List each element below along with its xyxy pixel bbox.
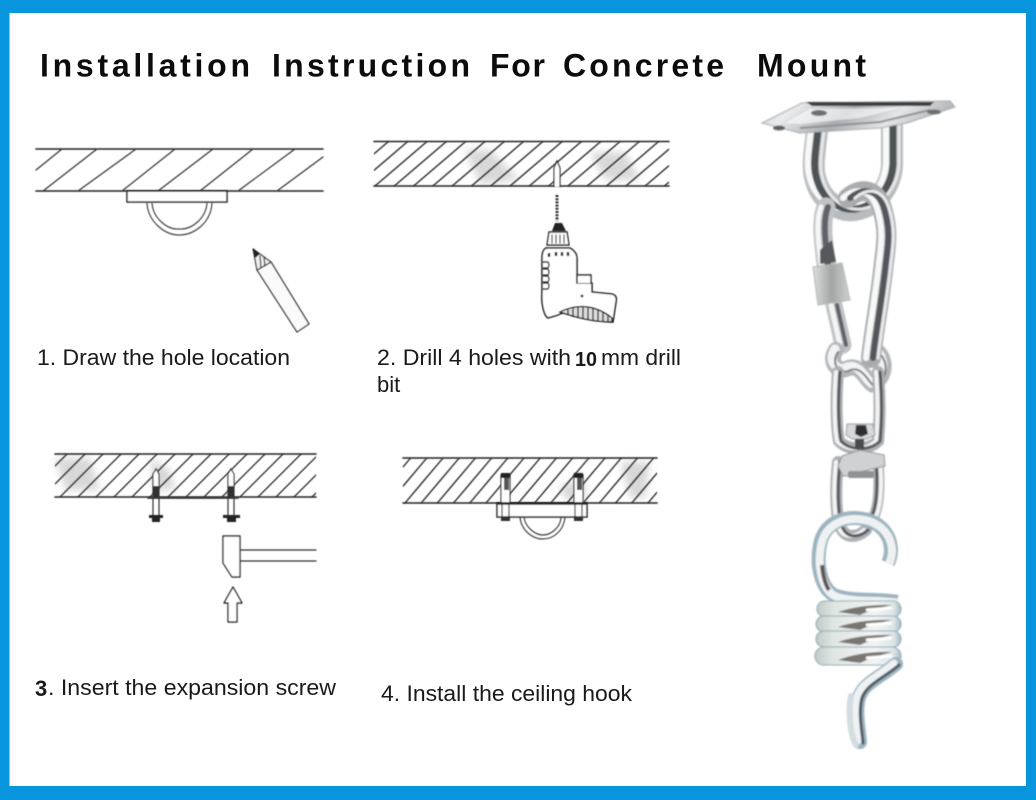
mount plate <box>762 101 955 133</box>
icon: hammer <box>223 536 316 577</box>
mounted plate, bolts and ring <box>497 473 587 539</box>
step 2 caption: 10 <box>575 349 597 371</box>
step 2 caption <box>377 345 681 397</box>
swivel collar <box>838 450 885 476</box>
upper swivel eye <box>835 372 882 448</box>
title: Concrete <box>563 48 724 84</box>
panel: step 1 draw the hole location <box>36 149 323 370</box>
concrete slab with hatching <box>374 142 669 186</box>
carabiner threaded detail <box>820 240 836 264</box>
step 2 caption: mm drill <box>601 345 681 370</box>
title <box>40 48 866 84</box>
title: Instruction <box>272 48 470 84</box>
title: Installation <box>40 48 250 84</box>
photo: ceiling hook hardware assembly <box>762 101 955 745</box>
icon: power drill <box>542 195 616 322</box>
swivel nut <box>846 424 875 449</box>
concrete slab with hatching <box>36 149 323 191</box>
lower swivel eye <box>834 460 881 536</box>
carabiner left arm and gate <box>818 207 846 345</box>
icon: pencil <box>253 248 309 332</box>
step 3 caption: . Insert the expansion screw <box>48 675 336 700</box>
step 1 caption: 1. Draw the hole location <box>37 345 290 370</box>
spring bottom hook <box>850 663 899 745</box>
concrete slab with hatching <box>55 454 316 497</box>
concrete slab with hatching <box>403 458 657 503</box>
panel: step 2 drill holes <box>374 142 681 397</box>
drilled hole <box>554 161 560 187</box>
expansion screws <box>148 469 240 522</box>
U bracket <box>808 124 899 210</box>
step 2 caption: 2. Drill 4 holes with <box>377 345 571 370</box>
title: For <box>490 48 545 84</box>
spring top hook <box>819 518 898 603</box>
panel: step 3 insert the expansion screw <box>35 454 336 701</box>
carabiner knurled sleeve <box>813 263 850 305</box>
title: Mount <box>757 48 866 84</box>
carabiner long spine <box>843 191 893 358</box>
carabiner bottom eye <box>832 349 886 386</box>
step 2 caption: bit <box>377 372 400 397</box>
step 4 caption: 4. Install the ceiling hook <box>381 681 633 706</box>
step 3 caption: 3 <box>35 676 47 701</box>
panel: step 4 install the ceiling hook <box>381 458 657 706</box>
spring coils <box>815 601 901 665</box>
mount plate with half ring <box>127 191 227 235</box>
arrow pointing up <box>224 587 242 622</box>
